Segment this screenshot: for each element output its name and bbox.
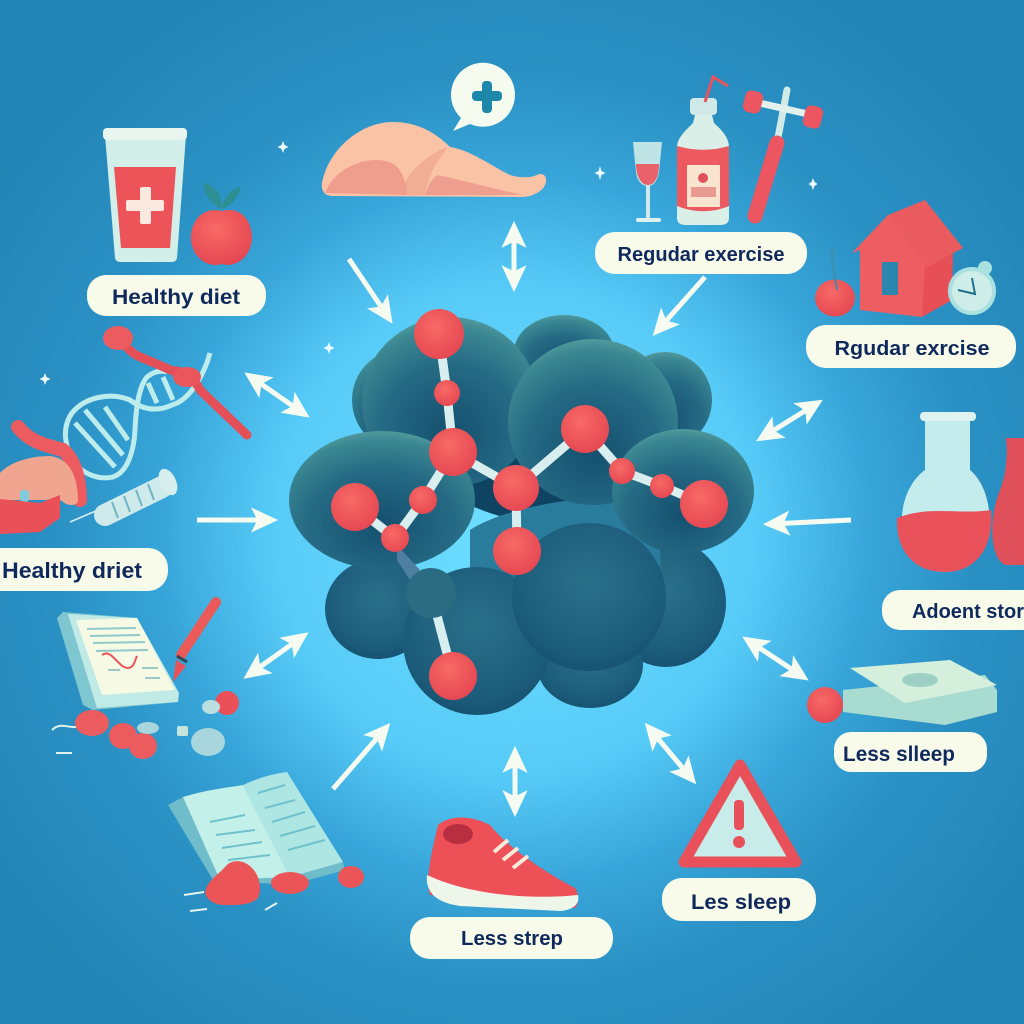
dark lobes xyxy=(289,315,754,715)
arrow: bottom left xyxy=(333,729,385,789)
icon: flask and vase xyxy=(897,412,1024,572)
arrow: left xyxy=(197,518,270,522)
icon: red blobs left xyxy=(52,710,225,759)
arrow: top left xyxy=(349,259,388,317)
label: adoent store xyxy=(882,590,1024,630)
label: regular exercise top: Regudar exercise xyxy=(618,244,784,266)
arrow: left upper double xyxy=(251,377,303,413)
arrow: right lower double xyxy=(749,641,802,676)
icon: liver with plus bubble xyxy=(322,63,546,197)
icon: cash stack with ball xyxy=(807,660,997,725)
arrow: right upper double xyxy=(763,404,816,437)
icon: wine glass, bottle, dumbbell xyxy=(633,77,824,225)
label: regular exercise right xyxy=(806,325,1016,368)
arrow: bottom right double xyxy=(650,729,691,778)
label: healthy diet left xyxy=(0,548,168,591)
label: healthy diet left: Healthy driet xyxy=(2,558,143,583)
icon: DNA helix and red tool xyxy=(65,326,247,478)
label: regular exercise top xyxy=(595,232,807,274)
label: less sleep bottom xyxy=(662,878,816,921)
arrow: left lower double xyxy=(250,637,302,674)
red atoms xyxy=(331,309,728,700)
arrow: top right xyxy=(658,277,705,330)
arrow: bottom double xyxy=(512,754,518,809)
speech bubble plus xyxy=(451,63,515,131)
icon: notebook and red pen xyxy=(57,602,239,715)
label: healthy diet top: Healthy diet xyxy=(112,286,240,309)
bonds xyxy=(355,334,704,676)
label: adoent store: Adoent stor xyxy=(912,601,1024,623)
label: regular exercise right: Rgudar exrcise xyxy=(834,338,990,360)
label: less strep xyxy=(410,917,613,959)
small dark node xyxy=(406,568,456,618)
icon: glass and apple xyxy=(103,128,252,265)
label: less sleep right xyxy=(834,732,987,772)
sparkles xyxy=(40,141,818,385)
arrows xyxy=(197,229,851,809)
icon: red mouth guard and syringe xyxy=(0,427,181,534)
icon: open book with red blobs xyxy=(168,772,364,911)
icon: red sneaker xyxy=(427,818,578,911)
label: less sleep bottom: Les sleep xyxy=(691,891,791,914)
label: less sleep right: Less slleep xyxy=(843,743,955,766)
central molecule cluster xyxy=(289,309,754,715)
icon: warning triangle xyxy=(684,765,796,862)
arrow: top double xyxy=(512,229,516,284)
arrow: right xyxy=(771,520,851,524)
label: less strep: Less strep xyxy=(461,928,563,950)
icon: house, cherry and clock xyxy=(815,200,994,317)
label: healthy diet top xyxy=(87,275,266,316)
